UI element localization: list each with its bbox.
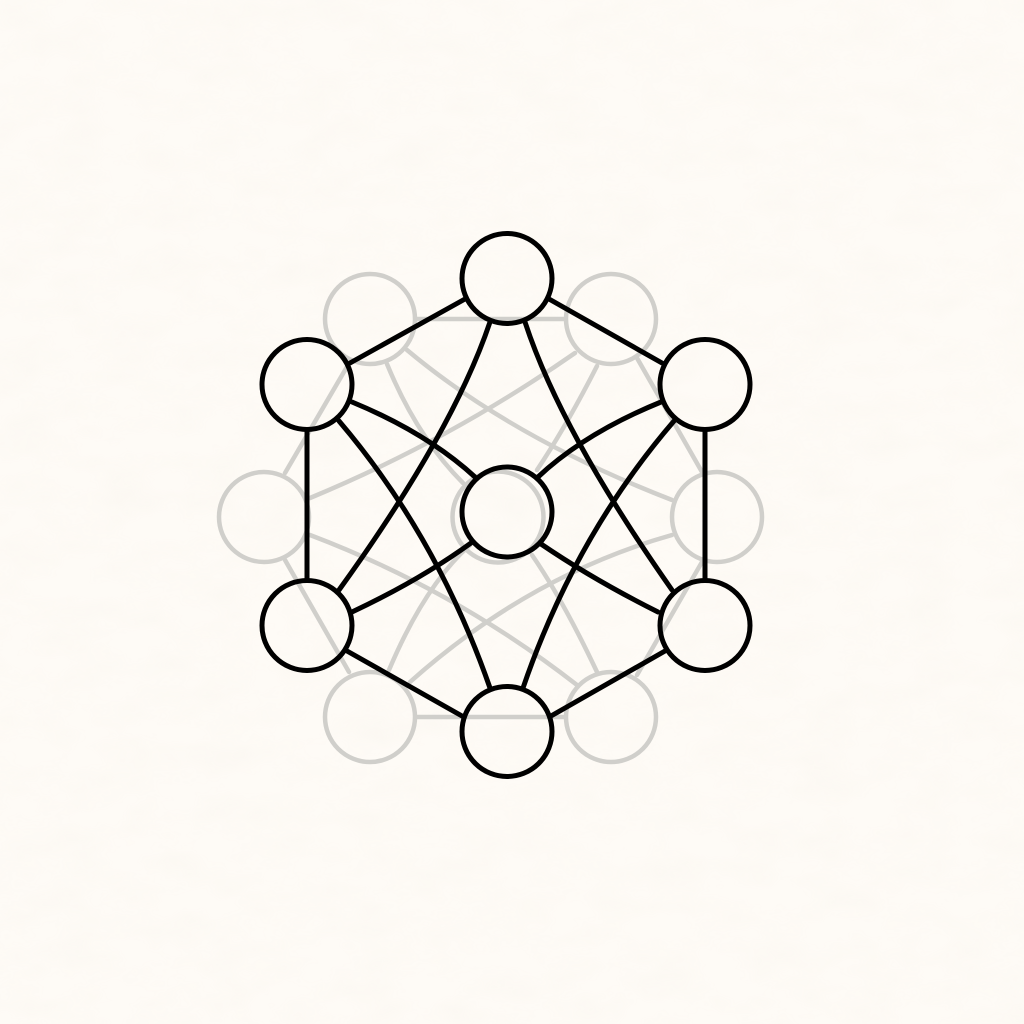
grey nodes [219, 274, 762, 762]
front network: black layer [262, 234, 750, 776]
black nodes [262, 234, 750, 776]
grey edges [285, 319, 702, 717]
black edges [307, 299, 705, 716]
back network: grey layer [219, 274, 762, 762]
